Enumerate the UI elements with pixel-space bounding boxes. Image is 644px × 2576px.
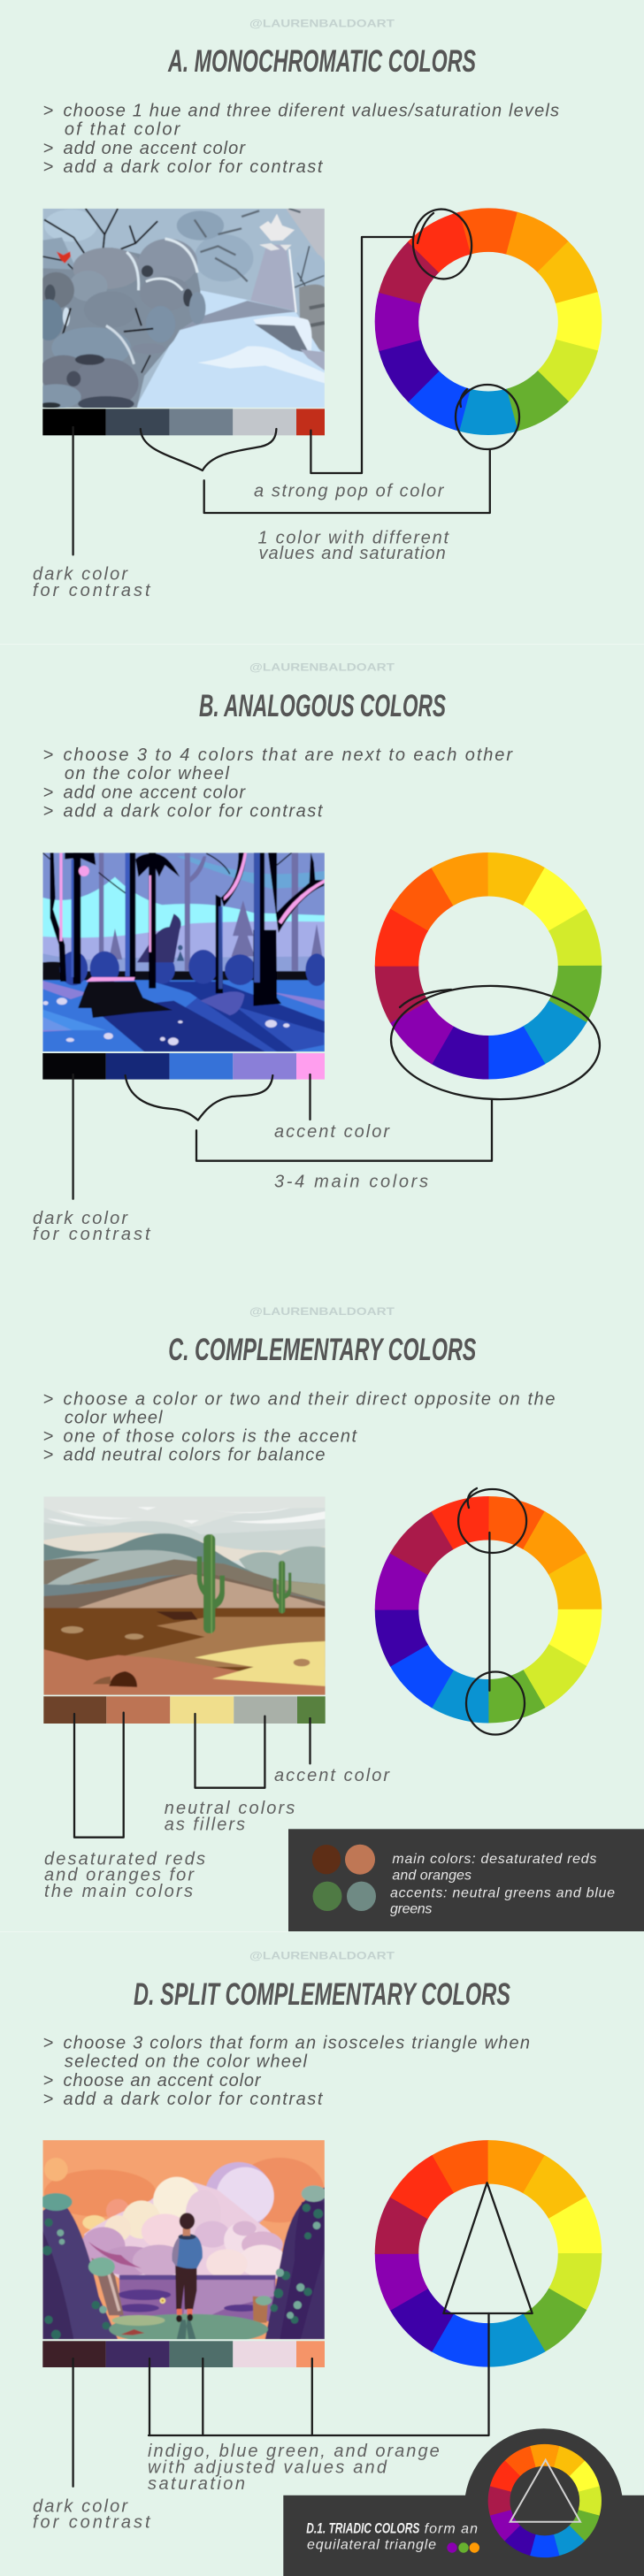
instructions text: add one accent color (64, 783, 246, 802)
color wheel (318, 795, 644, 1136)
instructions text: add a dark color for contrast (64, 801, 324, 821)
instructions text (42, 745, 513, 821)
annotation lines (73, 1074, 492, 1199)
instructions text (42, 2034, 530, 2109)
instructions text: > (42, 102, 53, 121)
annotation labels (33, 1122, 428, 1244)
equilateral triangle (510, 2460, 580, 2522)
annotation labels: dark color (33, 1209, 128, 1228)
color wheel (318, 2083, 644, 2425)
instructions text: > (42, 1427, 53, 1447)
wheel selection circles and connector (458, 1488, 526, 1735)
callout: triadic colors (283, 2412, 644, 2576)
instructions text: add a dark color for contrast (64, 2090, 324, 2109)
instructions text: add a dark color for contrast (64, 157, 324, 177)
annotation labels: for contrast (33, 2513, 151, 2533)
annotation labels: dark color (33, 565, 128, 585)
illustration: desert with cacti (43, 1496, 326, 1695)
annotation lines (73, 2313, 488, 2487)
callout text: accents: neutral greens and blue (390, 1885, 615, 1900)
instructions text (42, 102, 559, 177)
annotation labels: with adjusted values and (148, 2458, 387, 2478)
instructions text: choose an accent color (64, 2071, 262, 2091)
palette swatches (43, 1696, 326, 1724)
triadic text: D.1. TRIADIC COLORS (306, 2519, 420, 2536)
annotation labels: as fillers (165, 1815, 245, 1834)
palette swatches (42, 2341, 325, 2367)
instructions text: choose 3 to 4 colors that are next to each other (64, 745, 513, 765)
panel: D split complementary colors (33, 1949, 644, 2576)
wheel selection ellipse (389, 982, 602, 1103)
illustration: blue forest (42, 852, 325, 1052)
annotation labels: accent color (274, 1122, 390, 1142)
instructions text: color wheel (65, 1408, 163, 1427)
illustration: figure facing clouds (42, 2140, 325, 2340)
annotation labels: for contrast (33, 581, 151, 600)
color wheel (364, 1485, 613, 1735)
panel: A monochromatic colors (31, 18, 641, 600)
palette swatches (42, 409, 325, 435)
callout text (390, 1852, 615, 1916)
watermark: @LAURENBALDOART (249, 1305, 395, 1318)
callout text: main colors: desaturated reds (392, 1852, 596, 1867)
annotation labels: neutral colors (165, 1799, 295, 1818)
instructions text: choose 1 hue and three diferent values/saturation levels (64, 102, 559, 121)
heading: B: B. ANALOGOUS COLORS (199, 689, 446, 723)
instructions text: one of those colors is the accent (64, 1427, 357, 1447)
callout swatch circles (312, 1845, 376, 1911)
heading: A: A. MONOCHROMATIC COLORS (167, 44, 476, 79)
panel: B analogous colors (33, 661, 644, 1244)
instructions text: > (42, 801, 53, 821)
palette swatches (42, 1053, 325, 1080)
triadic text: form an (425, 2521, 478, 2536)
instructions text: > (42, 157, 53, 177)
instructions text: selected on the color wheel (65, 2052, 307, 2072)
instructions text: > (42, 1389, 53, 1409)
instructions text: of that color (65, 120, 181, 140)
instructions text (42, 1389, 556, 1464)
callout text: greens (390, 1901, 432, 1916)
instructions text: > (42, 2071, 53, 2091)
triadic text: equilateral triangle (307, 2538, 436, 2553)
annotation labels: values and saturation (258, 544, 446, 563)
triadic text (306, 2519, 478, 2553)
instructions text: add neutral colors for balance (64, 1445, 326, 1464)
annotation labels: the main colors (44, 1882, 193, 1901)
annotation labels: and oranges for (44, 1866, 195, 1885)
annotation labels: accent color (274, 1766, 390, 1785)
instructions text: > (42, 783, 53, 802)
annotation lines (74, 1713, 310, 1838)
instructions text: > (42, 2090, 53, 2109)
instructions text: > (42, 1445, 53, 1464)
heading: C: C. COMPLEMENTARY COLORS (168, 1333, 476, 1367)
annotation lines (73, 237, 490, 554)
panel: C complementary colors (42, 1305, 644, 1931)
wheel selection circles (410, 206, 519, 449)
color wheel (335, 169, 641, 475)
watermark: @LAURENBALDOART (249, 661, 395, 674)
isosceles triangle (443, 2182, 533, 2313)
callout: color summary (288, 1829, 644, 1931)
illustration: snowy forest (42, 209, 325, 408)
annotation labels: 3-4 main colors (274, 1173, 428, 1192)
annotation labels: saturation (148, 2474, 245, 2494)
annotation labels (33, 482, 449, 600)
instructions text: add one accent color (64, 139, 246, 158)
annotation labels (44, 1766, 390, 1901)
instructions text: > (42, 745, 53, 765)
instructions text: choose a color or two and their direct opposite on the (64, 1389, 556, 1409)
annotation labels: for contrast (33, 1225, 151, 1244)
annotation labels: 1 color with different (258, 528, 449, 547)
instructions text: > (42, 139, 53, 158)
watermark: @LAURENBALDOART (249, 1949, 395, 1961)
annotation labels: a strong pop of color (254, 482, 445, 501)
callout text: and oranges (392, 1869, 472, 1884)
instructions text: > (42, 2034, 53, 2053)
annotation labels: indigo, blue green, and orange (148, 2442, 440, 2461)
triadic color dots (447, 2542, 479, 2553)
annotation labels: desaturated reds (44, 1849, 205, 1869)
instructions text: on the color wheel (65, 764, 229, 784)
annotation labels: dark color (33, 2497, 128, 2517)
annotation labels (33, 2442, 440, 2533)
watermark: @LAURENBALDOART (249, 18, 395, 30)
instructions text: choose 3 colors that form an isosceles triangle when (64, 2034, 530, 2053)
mini color wheel (456, 2412, 633, 2576)
